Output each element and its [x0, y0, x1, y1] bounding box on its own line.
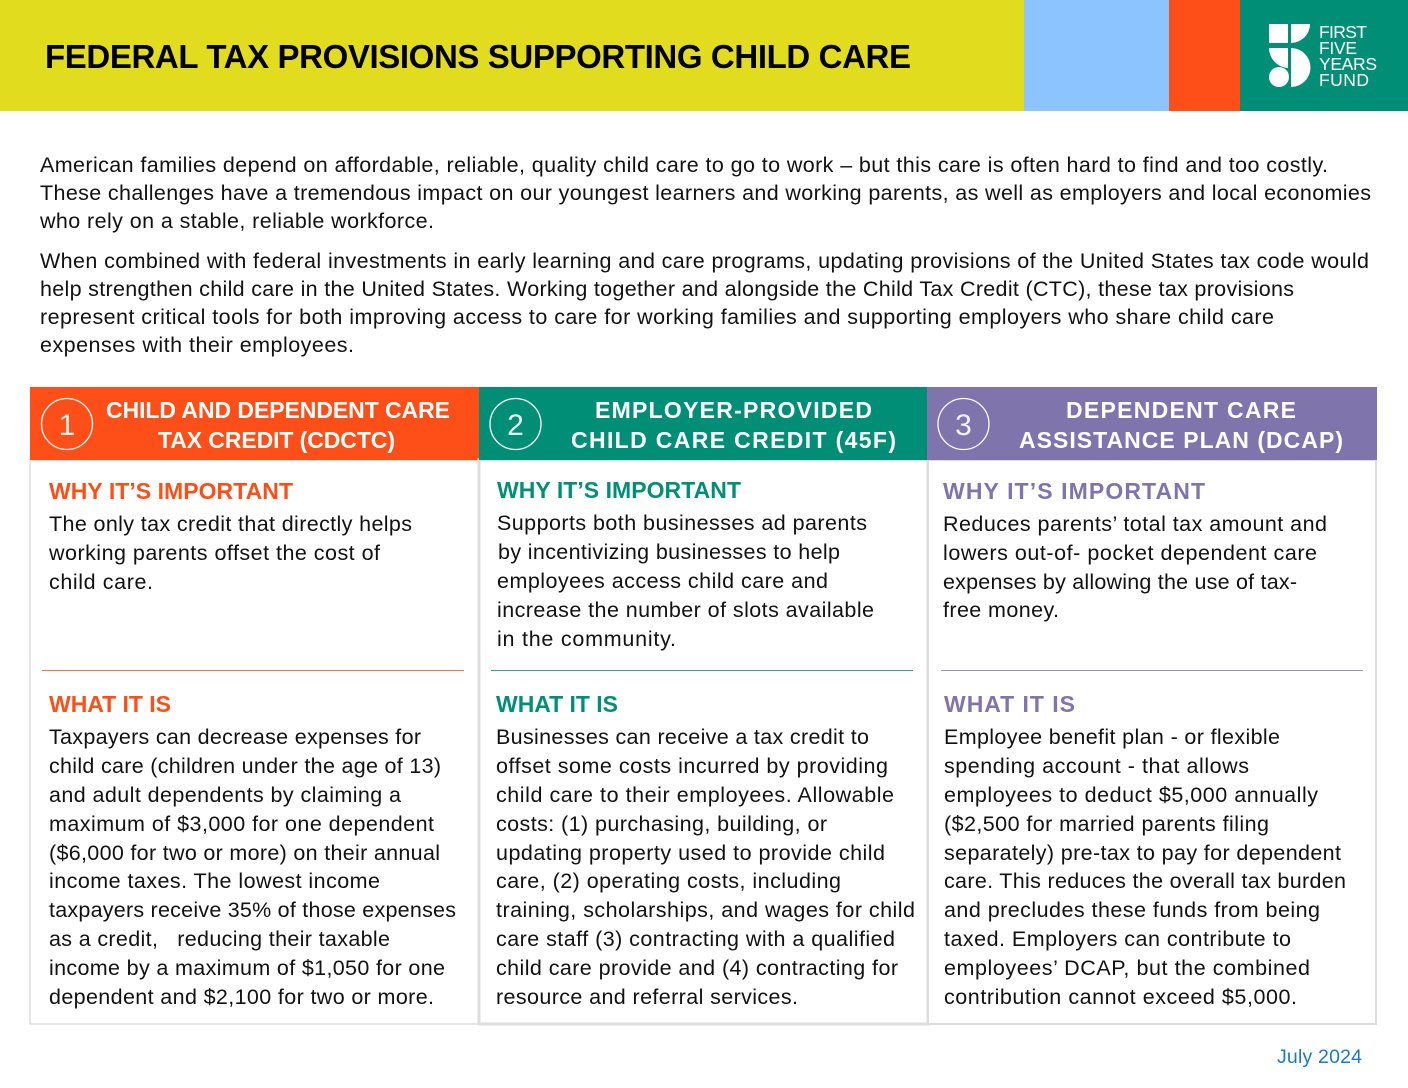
panel header: DCAP: DEPENDENT CARE — [1066, 397, 1296, 423]
what it is: CDCTC: income by a maximum of $1,050 for one — [49, 956, 445, 980]
what it is: DCAP: care. This reduces the overall tax burden — [944, 869, 1346, 893]
why it's important: 45F — [497, 477, 874, 651]
what it is: 45F — [496, 691, 915, 1009]
what it is: CDCTC: child care (children under the age of 13) — [49, 754, 441, 778]
why it's important: 45F: by incentivizing businesses to help — [498, 540, 840, 564]
intro paragraph 2: help strengthen child care in the United States. Working together and alongside the Child Tax Credit (CTC), these tax provisions — [40, 277, 1294, 301]
what it is: DCAP: contribution cannot exceed $5,000. — [944, 985, 1297, 1009]
why it's important: CDCTC: working parents offset the cost of — [48, 541, 380, 565]
what it is: DCAP: WHAT IT IS — [944, 691, 1075, 717]
what it is: 45F: care, (2) operating costs, including — [496, 869, 841, 893]
panel header: CDCTC: TAX CREDIT (CDCTC) — [158, 427, 395, 453]
title: FEDERAL TAX PROVISIONS SUPPORTING CHILD CARE — [45, 38, 911, 75]
what it is: DCAP: separately) pre-tax to pay for dependent — [944, 841, 1341, 865]
why it's important: 45F: in the community. — [497, 627, 676, 651]
why it's important: DCAP: Reduces parents’ total tax amount and — [943, 512, 1327, 536]
why it's important: 45F: Supports both businesses ad parents — [497, 511, 867, 535]
panel: CDCTC — [30, 387, 479, 1024]
logo: First Five Years Fund — [1269, 22, 1377, 90]
what it is: 45F: offset some costs incurred by providing — [496, 754, 888, 778]
intro paragraph 1: American families depend on affordable, reliable, quality child care to go to work – but this care is often hard to find and too costly. — [40, 153, 1328, 177]
what it is: CDCTC: dependent and $2,100 for two or more. — [49, 985, 434, 1009]
what it is: CDCTC: income taxes. The lowest income — [49, 869, 380, 893]
panel header: CDCTC: CHILD AND DEPENDENT CARE — [106, 397, 450, 423]
why it's important: DCAP: WHY IT’S IMPORTANT — [943, 478, 1205, 504]
intro paragraph 2: When combined with federal investments in early learning and care programs, updating provisions of the United States tax code would — [40, 249, 1369, 273]
what it is: DCAP: spending account - that allows — [944, 754, 1249, 778]
intro paragraph 1: who rely on a stable, reliable workforce. — [39, 209, 434, 233]
what it is: 45F: resource and referral services. — [496, 985, 798, 1009]
intro paragraph 2: expenses with their employees. — [40, 333, 354, 357]
what it is: 45F: child care provide and (4) contracting for — [496, 956, 898, 980]
panel header: 45F: 2 — [507, 409, 524, 442]
panel: 45F — [479, 387, 928, 1024]
why it's important: CDCTC: The only tax credit that directly helps — [49, 512, 412, 536]
what it is: DCAP: taxed. Employers can contribute to — [944, 927, 1291, 951]
panel header: CDCTC — [30, 387, 479, 460]
what it is: CDCTC: as a credit, reducing their taxable — [49, 927, 390, 951]
why it's important: CDCTC: child care. — [49, 570, 153, 594]
panel header: DCAP: 3 — [955, 409, 972, 442]
why it's important: 45F: WHY IT’S IMPORTANT — [497, 477, 741, 503]
panel header: 45F: EMPLOYER-PROVIDED — [595, 397, 872, 423]
why it's important: DCAP — [943, 478, 1327, 622]
logo: First Five Years Fund: FIVE — [1319, 38, 1357, 58]
intro paragraph 2: represent critical tools for both improving access to care for working families and supporting employers who share child care — [40, 305, 1274, 329]
intro paragraph 2 — [40, 249, 1369, 357]
what it is: CDCTC — [49, 691, 456, 1009]
what it is: CDCTC: maximum of $3,000 for one dependent — [49, 812, 434, 836]
panel header: DCAP: ASSISTANCE PLAN (DCAP) — [1019, 427, 1343, 453]
why it's important: DCAP: expenses by allowing the use of tax- — [943, 570, 1297, 594]
what it is: 45F: child care to their employees. Allowable — [496, 783, 894, 807]
why it's important: DCAP: free money. — [943, 598, 1059, 622]
why it's important: 45F: employees access child care and — [497, 569, 828, 593]
what it is: DCAP: employees to deduct $5,000 annually — [944, 783, 1318, 807]
what it is: 45F: updating property used to provide child — [496, 841, 885, 865]
logo: First Five Years Fund: YEARS — [1319, 54, 1377, 74]
intro paragraph 1: These challenges have a tremendous impact on our youngest learners and working parents, as well as employers and local economies — [40, 181, 1371, 205]
what it is: 45F: WHAT IT IS — [496, 691, 618, 717]
intro paragraph 1 — [39, 153, 1371, 233]
what it is: CDCTC: Taxpayers can decrease expenses for — [49, 725, 421, 749]
what it is: 45F: Businesses can receive a tax credit to — [496, 725, 869, 749]
what it is: 45F: care staff (3) contracting with a qualified — [496, 927, 895, 951]
what it is: DCAP: and precludes these funds from being — [944, 898, 1320, 922]
panel header: DCAP — [927, 387, 1377, 460]
what it is: 45F: training, scholarships, and wages for child — [496, 898, 915, 922]
panel header: 45F — [479, 387, 927, 460]
why it's important: 45F: increase the number of slots available — [497, 598, 874, 622]
why it's important: CDCTC: WHY IT’S IMPORTANT — [49, 478, 293, 504]
what it is: CDCTC: and adult dependents by claiming a — [49, 783, 401, 807]
what it is: CDCTC: WHAT IT IS — [49, 691, 171, 717]
logo: First Five Years Fund: FUND — [1319, 70, 1369, 90]
why it's important: CDCTC — [48, 478, 412, 594]
logo: First Five Years Fund: FIRST — [1319, 22, 1367, 42]
panel header: 45F: CHILD CARE CREDIT (45F) — [571, 427, 896, 453]
date: July 2024 — [1277, 1046, 1362, 1068]
panel: DCAP — [927, 387, 1377, 1024]
header band — [0, 0, 1408, 111]
what it is: DCAP: Employee benefit plan - or flexible — [944, 725, 1280, 749]
what it is: DCAP: ($2,500 for married parents filing — [944, 812, 1269, 836]
what it is: DCAP: employees’ DCAP, but the combined — [944, 956, 1310, 980]
panel header: CDCTC: 1 — [59, 409, 75, 442]
why it's important: DCAP: lowers out-of- pocket dependent care — [943, 541, 1317, 565]
what it is: CDCTC: taxpayers receive 35% of those expenses — [49, 898, 456, 922]
what it is: CDCTC: ($6,000 for two or more) on their annual — [49, 841, 440, 865]
what it is: DCAP — [944, 691, 1346, 1009]
what it is: 45F: costs: (1) purchasing, building, or — [496, 812, 827, 836]
